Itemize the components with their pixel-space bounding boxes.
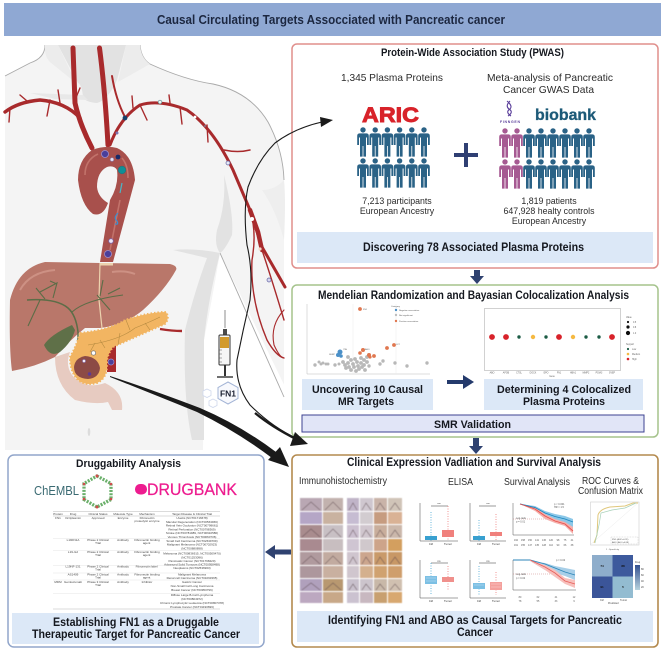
table: drugs targeting FN1 and ABO: Antibody [117, 538, 129, 542]
table: drugs targeting FN1 and ABO: Renal cell Carcinoma (NCT01093365) [167, 576, 217, 580]
chart: survival curves: 80 [519, 596, 522, 599]
chart: survival curves: p = 0.01 [516, 520, 526, 524]
chart: survival curves: p = 0.02 [556, 559, 566, 562]
chart: confusion matrix: 80 [641, 568, 644, 571]
icon: ARIC participants [357, 127, 430, 188]
data source label: GWAS meta-analysis: Meta-analysis of Pancreatic [487, 72, 613, 84]
arrow: pancreas to clinical panel [110, 376, 289, 467]
table: drugs targeting FN1 and ABO: Malignant Melanoma [178, 572, 206, 576]
chart: survival curves: 62 [537, 596, 540, 599]
sub-heading: IHC: Immunohistochemistry [299, 476, 387, 487]
icon: bile ducts [27, 280, 123, 363]
chart: confusion matrix: 20 [641, 586, 644, 589]
finding: druggability result [12, 613, 259, 644]
chart: survival curves [513, 503, 576, 603]
chart: survival curves: Log-rank [516, 517, 527, 520]
icon: syringe [217, 310, 233, 377]
finding: MR targets: Uncovering 10 Causal [312, 384, 423, 396]
arrow: clinical to druggability [265, 545, 291, 559]
table: drugs targeting FN1 and ABO: Antibody [117, 580, 129, 584]
chart: colocalization bubble plot: ABO [490, 372, 495, 374]
icon: plus [454, 143, 478, 167]
chart: survival curves: 55 [537, 600, 540, 603]
chart: survival curves: 120 [549, 539, 554, 542]
panel: PWAS [292, 44, 658, 268]
table: drugs targeting FN1 and ABO: Trial [95, 568, 101, 572]
navel [88, 428, 90, 436]
chart: colocalization bubble plot: EPO [544, 372, 549, 374]
chart: survival curves: 9 [573, 600, 575, 603]
chart: colocalization bubble plot: 0.8 [633, 327, 637, 329]
table: drugs targeting FN1 and ABO: (NCT00880898) [181, 546, 203, 550]
table: drugs targeting FN1 and ABO: Approved [92, 516, 105, 520]
table: drugs targeting FN1 and ABO: Phase 3 Clinical [87, 580, 109, 584]
chart: colocalization bubble plot: HBA1 [570, 372, 577, 374]
finding: colocalized proteins: Determining 4 Colocalized [497, 384, 631, 396]
table: drugs targeting FN1 and ABO: Diffuse Large B-Cell Lymphoma [171, 593, 214, 597]
chart: colocalization bubble plot: High [632, 359, 637, 361]
chart: survival curves: 135 [535, 544, 540, 547]
chart: MR volcano scatter plot: Positive association [399, 320, 419, 323]
chart: survival curves: 162 [514, 539, 519, 542]
table: drugs targeting FN1 and ABO: Chronic Lymphocytic Leukemia (NCT00807378) [160, 601, 224, 605]
heading: Mendelian Randomization and Bayasian Colocalization Analysis [318, 290, 629, 302]
chart: survival curves: Log-rank [516, 573, 527, 576]
table: drugs targeting FN1 and ABO: Mechanism [139, 512, 155, 516]
chart: colocalization bubble plot: CTSL [516, 372, 523, 374]
chart: confusion matrix: 5 [622, 585, 624, 589]
table: drugs targeting FN1 and ABO: MDM [54, 580, 62, 584]
table: drugs targeting FN1 and ABO: Fibronectin binding [134, 550, 160, 554]
finding: PWAS result: Discovering 78 Associated Plasma Proteins [363, 242, 584, 254]
table: drugs targeting FN1 and ABO: agent [143, 541, 150, 545]
table: drugs targeting FN1 and ABO: Trial [95, 553, 101, 557]
arrow: torso curve to PWAS and clinical panels [237, 117, 333, 446]
table: drugs targeting FN1 and ABO: (NCT01253096) [181, 555, 203, 559]
table: drugs targeting FN1 and ABO: Stroke (NCT00781989, NCT00910586) [166, 531, 218, 535]
table: drugs targeting FN1 and ABO: Clinical Status [88, 512, 108, 516]
chart: survival curves: 158 [521, 539, 526, 542]
table: drugs targeting FN1 and ABO: Small Cell Carcinoma (NCT02639709) [166, 539, 218, 543]
table: drugs targeting FN1 and ABO: Retinal Perforation (NCT00798369) [168, 527, 216, 531]
icon: duodenum [55, 352, 122, 410]
table: drugs targeting FN1 and ABO: Neoplasms (NCT02536963) [173, 566, 211, 570]
table: drugs targeting FN1 and ABO: Phase 2 Clinical [87, 538, 109, 542]
table: drugs targeting FN1 and ABO: Melanoma (NCT00836915, NCT00509470) [163, 552, 221, 556]
chart: ELISA box plots: Tumor [492, 599, 500, 603]
logo: FinnGen [500, 101, 520, 124]
anatomy illustration: torso with organs [5, 45, 290, 450]
icon: pancreas with tumour [70, 312, 168, 384]
chart: MR volcano scatter plot [307, 304, 430, 374]
chart: MR volcano scatter plot: ITIH [343, 349, 348, 351]
chart: ELISA box plots: Tumor [444, 542, 452, 546]
chart: confusion matrix: Ctrl [600, 599, 604, 602]
chart: MR volcano scatter plot: FN1 [363, 309, 368, 311]
table: drugs targeting FN1 and ABO: (NCT00804972) [181, 597, 203, 601]
finding: colocalized proteins: Plasma Proteins [523, 396, 605, 408]
body shading [30, 45, 285, 440]
chart: survival curves: 90 [557, 544, 560, 547]
chart: ELISA box plots: Tumor [492, 542, 500, 546]
chart: MR volcano scatter plot: ABO [365, 348, 370, 351]
table: drugs targeting FN1 and ABO: Antibody [117, 564, 129, 568]
table: drugs targeting FN1 and ABO: Prostate Cancer (NCT01190696) [170, 605, 214, 609]
chart: ELISA box plots: ns [438, 559, 441, 563]
body contour lines [5, 45, 284, 397]
chart: ELISA box plots: Ctrl [429, 599, 434, 603]
chart: survival curves: 128 [542, 544, 547, 547]
chart: ELISA box plots: *** [437, 502, 442, 506]
table: drugs targeting FN1 and ABO: Drug [70, 512, 77, 516]
title bar [4, 3, 661, 36]
logo: ChEMBL: ChEMBL [34, 483, 79, 498]
heading: Clinical Expression Vadliation and Survival Analysis [347, 457, 601, 469]
chart: ROC curves: ABO (AUC=0.88) [612, 541, 629, 544]
panel: Druggability [8, 455, 264, 647]
chart: colocalization bubble plot: SVEP [609, 372, 616, 374]
sub-heading: ELISA: ELISA [448, 477, 473, 488]
sub-heading: ROC and confusion matrix: Confusion Matrix [578, 486, 643, 497]
table: drugs targeting FN1 and ABO: Uveitis (NCT01716678) [176, 516, 208, 520]
caption: ARIC cohort: European Ancestry [360, 206, 435, 216]
chart: survival curves: p = 0.02 [516, 577, 526, 580]
chart: confusion matrix: 88 [621, 564, 625, 568]
chart: colocalization bubble plot [484, 308, 640, 378]
table: drugs targeting FN1 and ABO: Phase 2 Clinical [87, 572, 109, 576]
table: drugs targeting FN1 and ABO [53, 512, 224, 609]
embolic particles [102, 100, 271, 282]
chart: colocalization bubble plot: Gene [549, 376, 556, 378]
chart: confusion matrix: Predicted [608, 602, 619, 605]
table: drugs targeting FN1 and ABO: Antibody [117, 572, 129, 576]
chart: survival curves: HR = 1.5 [554, 506, 565, 509]
table: drugs targeting FN1 and ABO: Target Disease & Clinical Trial [172, 512, 212, 516]
icon: abdominal aorta [107, 329, 182, 372]
logo: ARIC: ARIC [362, 104, 419, 127]
chart: survival curves: 155 [521, 544, 526, 547]
finding: druggability result: Therapeutic Target for Pancreatic Cancer [32, 629, 240, 641]
icon: GWAS patients and controls [499, 128, 595, 189]
table: drugs targeting FN1 and ABO: proteolytic enzyme [134, 519, 160, 523]
chart: MR volcano scatter plot: Category [391, 305, 401, 308]
chart: colocalization bubble plot: Low [632, 349, 637, 351]
finding: clinical result: Cancer [457, 627, 493, 639]
chart: colocalization bubble plot: MMP2 [583, 372, 590, 374]
table: drugs targeting FN1 and ABO: Retinal Vein Occlusion (NCT00799661) [166, 524, 218, 528]
table: drugs targeting FN1 and ABO: Malignant Melanoma (NCT00702923) [167, 543, 217, 547]
chart: survival curves: 38 [571, 544, 574, 547]
table: drugs targeting FN1 and ABO: Fibronectin label [136, 564, 158, 568]
table: drugs targeting FN1 and ABO: L19FN1A [67, 538, 79, 542]
chart: survival curves: 98 [557, 539, 560, 542]
chart: colocalization bubble plot: DOCK [530, 372, 537, 374]
chart: ELISA box plots: *** [486, 502, 491, 506]
chart: survival curves: 110 [549, 544, 554, 547]
caption: ARIC cohort: 7,213 participants [362, 196, 432, 206]
chart: ELISA box plots: Tumor [444, 599, 452, 603]
chart: ELISA box plots: Ctrl [477, 542, 482, 546]
logo: DrugBank: DRUGBANK [147, 480, 238, 499]
heading: Druggability Analysis [76, 458, 181, 470]
chart: ROC curves [590, 502, 639, 551]
chart: ROC curves: 1 - Specificity [606, 548, 620, 551]
table: drugs targeting FN1 and ABO: Trial [95, 583, 101, 587]
chart: MR volcano scatter plot: LYZ [396, 344, 401, 346]
arrow: MR to clinical [469, 438, 483, 454]
table: drugs targeting FN1 and ABO: L19NF-131 [65, 564, 81, 568]
table: drugs targeting FN1 and ABO: Fibronectin [140, 516, 155, 520]
sub-heading: survival: Survival Analysis [504, 477, 570, 488]
table: drugs targeting FN1 and ABO: Advanced Solid Tumours (NCT00958498) [164, 562, 220, 566]
torso silhouette [5, 45, 284, 450]
finding: MR targets: MR Targets [338, 396, 394, 408]
table: drugs targeting FN1 and ABO: Breast Cancer (NCT00950796) [171, 588, 213, 592]
chart: survival curves: 33 [555, 600, 558, 603]
chart: MR volcano scatter plot: Negative association [399, 309, 420, 312]
icon: FN1 molecule hexagons: FN1 [220, 388, 236, 398]
chart: ROC curves: FN1 (AUC=0.91) [612, 538, 629, 541]
chart: confusion matrix [592, 555, 644, 605]
chart: survival curves: 66 [564, 544, 567, 547]
finding: clinical result [297, 611, 653, 642]
logo: ChEMBL [34, 474, 112, 508]
chart: colocalization bubble plot: Medium [632, 354, 640, 356]
table: drugs targeting FN1 and ABO: Trial [95, 576, 101, 580]
finding: clinical result: Identifying FN1 and ABO as Causal Targets for Pancreatic [328, 615, 623, 627]
icon: gallbladder [44, 325, 75, 354]
icon: liver [10, 262, 176, 371]
panel: Mendelian Randomization [292, 285, 658, 437]
table: drugs targeting FN1 and ABO: Fibronectin binding [134, 538, 160, 542]
table: drugs targeting FN1 and ABO: Venous Thrombosis (NCT00060736) [168, 535, 216, 539]
chart: ELISA box plots: Ctrl [477, 599, 482, 603]
arrow: MR to colocalization [447, 375, 474, 389]
chart: confusion matrix: Tumor [620, 599, 627, 602]
chart: confusion matrix: 60 [641, 574, 644, 577]
chart: survival curves: p < 0.001 [554, 503, 565, 506]
finding: colocalized proteins [484, 379, 643, 410]
finding: druggability result: Establishing FN1 as a Druggable [53, 617, 219, 629]
chart: survival curves: 141 [535, 539, 540, 542]
table: drugs targeting FN1 and ABO: Enzyme [118, 516, 129, 520]
caption: GWAS cohort: 647,928 healty controls [504, 206, 595, 216]
table: drugs targeting FN1 and ABO: AS1409 [68, 572, 79, 576]
sub-heading: ROC and confusion matrix: ROC Curves & [582, 476, 639, 487]
caption: GWAS cohort: European Ancestry [512, 216, 587, 226]
chart: survival curves: 78 [519, 600, 522, 603]
chart: survival curves: 12 [573, 596, 576, 599]
table: drugs targeting FN1 and ABO: Gastric Cancer [182, 580, 202, 584]
image grid: immunohistochemistry micrographs [300, 498, 402, 603]
table: drugs targeting FN1 and ABO: Phase 2 Clinical [87, 550, 109, 554]
chart: colocalization bubble plot: APOB [503, 372, 510, 374]
table: drugs targeting FN1 and ABO: Pancreatic Cancer (NCT01798420) [168, 559, 216, 563]
table: drugs targeting FN1 and ABO: Molecule Type [113, 512, 133, 516]
icon: FN1 molecule hexagons [203, 382, 238, 408]
chart: colocalization bubble plot: Value [626, 317, 632, 319]
gap between torso and arm [203, 253, 290, 450]
title bar: Causal Circulating Targets Assocciated with Pancreatic cancer [157, 13, 505, 27]
table: drugs targeting FN1 and ABO: Phase 2 Clinical [87, 564, 109, 568]
icon: aortic arch [78, 100, 271, 282]
chart: colocalization bubble plot: FN1 [557, 372, 562, 374]
chart: MR volcano scatter plot: Not significant [399, 314, 413, 317]
panel: Clinical expression and survival [292, 455, 658, 647]
chart: survival curves: 41 [571, 539, 574, 542]
chart: ELISA box plots: ns [487, 559, 490, 563]
table: drugs targeting FN1 and ABO: Non-Small Cell Lung Carcinoma [171, 584, 214, 588]
SMR validation bar [302, 415, 644, 432]
chart: survival curves: 136 [542, 539, 547, 542]
chart: colocalization bubble plot: Support [626, 343, 634, 346]
chart: colocalization bubble plot: PDIA3 [596, 372, 603, 374]
chart: ELISA box plots [420, 502, 506, 603]
chart: confusion matrix: 40 [641, 580, 644, 583]
table: drugs targeting FN1 and ABO: Antibody [117, 550, 129, 554]
heading: Protein-Wide Association Study (PWAS) [381, 47, 564, 59]
logo: FinnGen: FINNGEN [500, 120, 520, 124]
chart: confusion matrix: Freq [635, 561, 641, 564]
chart: ELISA box plots: Ctrl [429, 542, 434, 546]
table: drugs targeting FN1 and ABO: Trial [95, 541, 101, 545]
table: drugs targeting FN1 and ABO: agent [143, 576, 150, 580]
chart: survival curves: 75 [564, 539, 567, 542]
table: drugs targeting FN1 and ABO: Macular Degeneration (NCT00563966) [166, 520, 218, 524]
caption: GWAS cohort: 1,819 patients [521, 196, 577, 206]
icon: arteries of head and arms [5, 48, 285, 358]
data source label: GWAS meta-analysis: Cancer GWAS Data [503, 84, 594, 96]
chart: colocalization bubble plot: 0.5 [633, 322, 637, 324]
finding: PWAS result [297, 232, 653, 263]
chart: survival curves: 41 [555, 596, 558, 599]
data source label: plasma proteins: 1,345 Plasma Proteins [341, 72, 443, 84]
chart: confusion matrix: 74 [600, 564, 604, 568]
logo: biobank: biobank [535, 107, 596, 124]
chart: survival curves: 147 [528, 544, 533, 547]
table: drugs targeting FN1 and ABO: Gemtuzumab [64, 580, 82, 584]
table: drugs targeting FN1 and ABO: Protein [53, 512, 63, 516]
arrow: PWAS to MR [470, 270, 484, 284]
table: drugs targeting FN1 and ABO: Inhibitor [142, 580, 152, 584]
chart: survival curves: 150 [528, 539, 533, 542]
table: drugs targeting FN1 and ABO: FN1 [55, 516, 61, 520]
table: drugs targeting FN1 and ABO: Fibronectin binding [134, 572, 160, 576]
finding: MR targets [302, 379, 433, 410]
table: drugs targeting FN1 and ABO: agent [143, 553, 150, 557]
chart: survival curves: 161 [514, 544, 519, 547]
chart: colocalization bubble plot: 1.0 [633, 333, 637, 335]
SMR validation bar: SMR Validation [434, 419, 511, 431]
table: drugs targeting FN1 and ABO: L19-IL2 [68, 550, 78, 554]
table: drugs targeting FN1 and ABO: Ocriplasmin [65, 516, 81, 520]
chart: MR volcano scatter plot: SERP [329, 354, 335, 356]
chart: confusion matrix: 91 [600, 585, 604, 589]
